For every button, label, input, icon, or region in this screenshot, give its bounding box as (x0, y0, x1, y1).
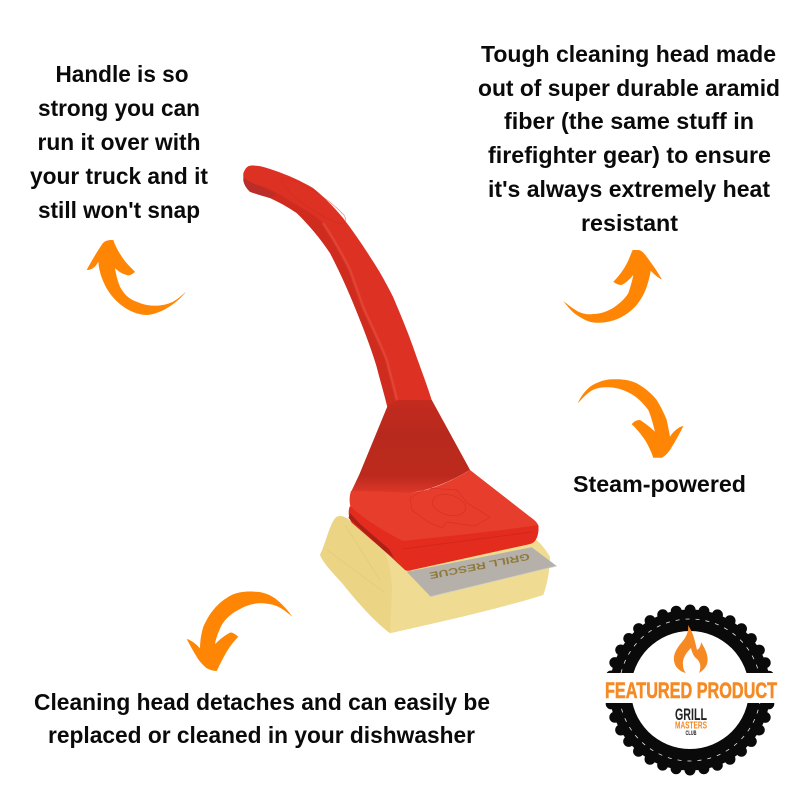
text: cleaning head material: it's always extremely heat (488, 176, 770, 202)
text: cleaning head material: Tough cleaning head made (481, 41, 776, 67)
handle underside at tip (243, 178, 276, 198)
text: detachable head (34, 689, 490, 748)
text: handle strength: strong you can (38, 95, 200, 121)
text: handle strength: Handle is so (56, 61, 188, 87)
handle highlight ridge (323, 223, 397, 400)
arrow: pointing to cleaning head text (563, 250, 662, 323)
badge: featured product (603, 610, 779, 770)
text: handle strength: run it over with (38, 129, 200, 155)
top face of head (350, 470, 538, 542)
arrow: pointing to steam-powered text (578, 379, 683, 458)
logo: grill masters club: CLUB (686, 731, 697, 737)
text: cleaning head material: fiber (the same stuff in (504, 108, 754, 134)
text: detachable head: Cleaning head detaches and can easily be (34, 689, 490, 715)
text: handle strength: still won't snap (38, 197, 200, 223)
text: detachable head: replaced or cleaned in your dishwasher (48, 722, 475, 748)
icon: flame (674, 625, 708, 673)
logo: grill masters club: MASTERS (675, 720, 707, 732)
embossed fire emblem (410, 488, 490, 528)
arrow: pointing to detachable head text (187, 591, 292, 671)
product: grill cleaning brush (243, 166, 557, 633)
red handle (243, 166, 470, 490)
logo: grill masters club: GRILL (675, 706, 707, 724)
logo: grill masters club (675, 706, 707, 737)
handle shaded side (243, 180, 397, 407)
text: steam-powered: Steam-powered (573, 471, 746, 497)
metal scraper blade (407, 547, 557, 597)
sponge cleaning head (320, 516, 550, 633)
badge gear body (610, 610, 770, 770)
text: cleaning head material: resistant (581, 210, 678, 236)
arrow: pointing to handle text (87, 240, 186, 315)
handle neck (351, 400, 470, 493)
head underside shadow (348, 513, 394, 558)
metal scraper blade: GRILL RESCUE (428, 550, 531, 581)
head front band (349, 506, 539, 571)
text: cleaning head material: out of super durable aramid (478, 75, 780, 101)
text: cleaning head material (478, 41, 780, 236)
text: handle strength (30, 61, 208, 223)
text: handle strength: your truck and it (30, 163, 208, 189)
text: cleaning head material: firefighter gear) to ensure (488, 142, 771, 168)
handle embossed oval (281, 178, 345, 224)
